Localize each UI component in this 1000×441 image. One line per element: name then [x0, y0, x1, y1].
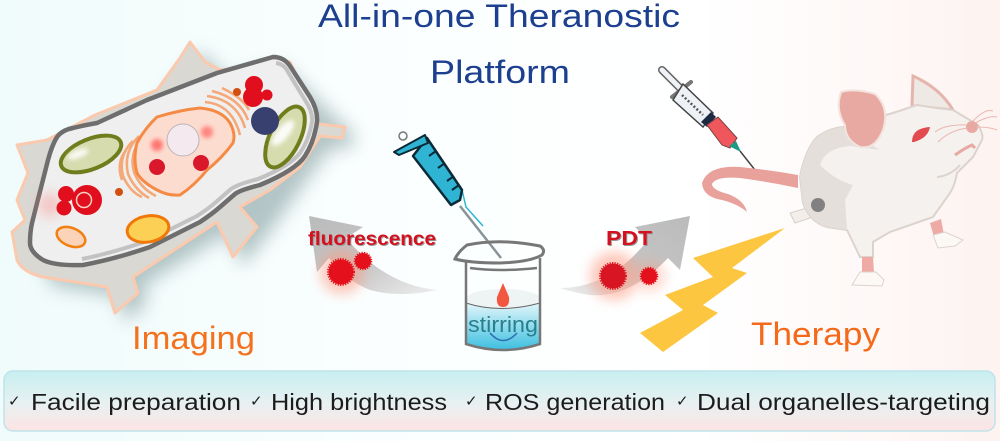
feature: ROS generation: ROS generation [485, 389, 665, 415]
far ear [912, 76, 953, 110]
barrel [413, 138, 462, 205]
feature: high brightness: ✓ [250, 393, 263, 410]
tail [702, 167, 798, 212]
feature: dual organelles-targeting: ✓ [676, 393, 689, 410]
arrow: PDT [560, 216, 690, 295]
water [466, 303, 540, 349]
nucleus [135, 108, 234, 195]
mouth [955, 145, 975, 155]
label: Therapy: Therapy [751, 316, 880, 352]
red droplet [497, 283, 509, 307]
red lysosomes top [243, 76, 272, 107]
needle [740, 151, 755, 170]
dark blue organelle [251, 107, 279, 135]
chloroplast right [257, 101, 313, 173]
label: stirring: stirring [468, 312, 538, 337]
nose [966, 121, 978, 133]
body [800, 105, 982, 257]
stir bar arc [490, 333, 517, 340]
dark stopper [701, 112, 716, 127]
mitochondrion orange [125, 213, 171, 245]
front foot [852, 272, 884, 286]
feature: facile preparation: Facile preparation [31, 389, 241, 415]
feature: dual organelles-targeting: Dual organelles-targeting [697, 389, 990, 415]
needle hub [729, 141, 741, 152]
flange [394, 135, 428, 155]
nanoparticles: PDT [590, 252, 665, 300]
back foot [790, 207, 810, 223]
beaker rim [455, 242, 544, 263]
body shading [800, 127, 880, 230]
cell outer membrane and protrusions [12, 42, 345, 313]
chloroplast left [56, 128, 126, 180]
rear foot [933, 232, 963, 248]
label: Imaging: Imaging [132, 320, 255, 356]
red fill [707, 117, 737, 148]
label: PDT: PDT [606, 228, 652, 250]
plunger [662, 70, 682, 90]
beaker body [466, 258, 540, 350]
rear leg [930, 219, 944, 237]
eye [912, 127, 930, 142]
vesicle [54, 223, 88, 251]
feature bar [4, 371, 995, 431]
label: fluorescence: fluorescence [308, 229, 436, 250]
cell cytoplasm and wall [30, 57, 317, 265]
feature: high brightness: High brightness [271, 389, 447, 415]
needle [460, 206, 501, 258]
near ear [839, 90, 885, 147]
cell shadow [35, 51, 355, 322]
inner wall highlight [82, 63, 312, 259]
barrel [673, 84, 713, 127]
flange [672, 82, 691, 97]
mouse [702, 76, 997, 286]
nucleolus [167, 124, 199, 156]
arrow: fluorescence [309, 216, 437, 294]
beaker [455, 242, 544, 350]
plunger knob [399, 132, 407, 140]
endoplasmic reticulum [120, 88, 249, 198]
neck line [937, 165, 960, 177]
syringe: blue [394, 132, 501, 258]
feature: facile preparation: ✓ [8, 393, 21, 410]
cell illustration [12, 42, 355, 322]
front leg [862, 257, 874, 273]
nuclear particles [149, 159, 165, 175]
whiskers [935, 110, 997, 142]
title [318, 0, 680, 90]
title: Platform [430, 54, 570, 90]
tumor [811, 198, 825, 212]
red organelle group [38, 193, 62, 217]
beaker upper liquid [466, 289, 540, 309]
nanoparticles: fluorescence [320, 250, 371, 294]
nucleus glow [151, 139, 163, 151]
graduation marks [429, 151, 459, 190]
syringe: red [662, 70, 755, 170]
feature: ROS generation: ✓ [465, 393, 478, 410]
lightning bolt [640, 228, 785, 352]
